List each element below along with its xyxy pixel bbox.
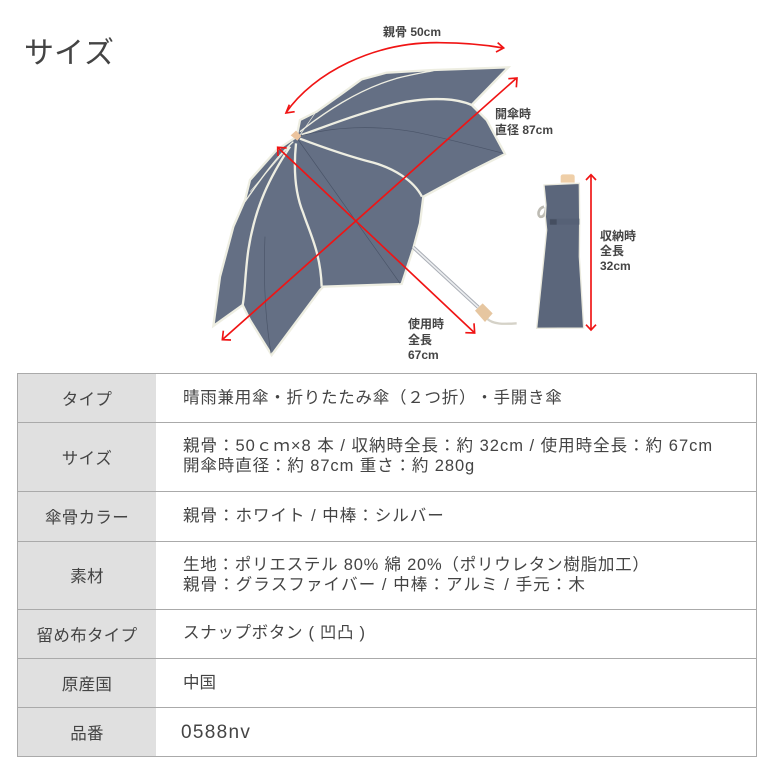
row: size: サイズ	[62, 450, 112, 468]
diameter label	[495, 106, 553, 137]
umbrella size diagram	[212, 24, 636, 362]
open length label: 67cm	[408, 348, 439, 362]
title: サイズ	[24, 37, 114, 70]
row: type: 晴雨兼用傘・折りたたみ傘（２つ折）・手開き傘	[183, 389, 562, 407]
red length arrow	[586, 175, 596, 330]
top ferrule	[291, 131, 301, 141]
row: size	[18, 423, 756, 492]
row: item number: 0588nv	[181, 722, 251, 743]
row: fastener	[18, 610, 756, 659]
diameter label: 直径 87cm	[495, 122, 553, 137]
rib label: 親骨 50cm	[383, 24, 441, 39]
folded length label: 全長	[600, 243, 624, 258]
row: material	[18, 542, 756, 610]
row: material: 素材	[70, 568, 104, 586]
canopy	[213, 67, 508, 355]
open length label: 全長	[408, 332, 432, 347]
folded canopy	[537, 183, 584, 328]
row: item number: 品番	[70, 724, 104, 742]
row: material: 親骨：グラスファイバー / 中棒：アルミ / 手元：木	[183, 576, 586, 594]
open length label	[408, 316, 444, 362]
folded handle	[561, 174, 575, 183]
open length label: 使用時	[408, 316, 444, 331]
row: frame colour: 親骨：ホワイト / 中棒：シルバー	[183, 506, 445, 524]
row: origin: 中国	[183, 674, 216, 692]
row: type	[18, 374, 756, 423]
row: type: タイプ	[62, 390, 112, 408]
row: fastener: 留め布タイプ	[37, 626, 137, 644]
row: material: 生地：ポリエステル 80% 綿 20%（ポリウレタン樹脂加工）	[183, 556, 650, 574]
folded length label: 収納時	[600, 228, 636, 243]
open umbrella	[213, 67, 517, 355]
folded umbrella	[537, 174, 596, 330]
folded strap	[548, 219, 579, 225]
row: item number	[18, 708, 251, 756]
folded length label	[600, 228, 636, 273]
row: frame colour: 傘骨カラー	[45, 509, 129, 527]
row: origin	[18, 659, 756, 708]
diameter label: 開傘時	[495, 106, 531, 121]
strap loop	[539, 207, 546, 217]
folded length label: 32cm	[600, 259, 631, 273]
row: size: 親骨：50ｃｍ×8 本 / 収納時全長：約 32cm / 使用時全長：約 67cm	[183, 437, 713, 455]
canopy ribs	[243, 99, 472, 305]
row: frame colour	[18, 492, 756, 542]
red measurement arrows	[222, 43, 517, 340]
shaft and handle	[413, 247, 478, 307]
row: origin: 原産国	[62, 676, 112, 694]
row: fastener: スナップボタン ( 凹凸 )	[183, 624, 366, 642]
spec table	[17, 373, 757, 757]
row: size: 開傘時直径：約 87cm 重さ：約 280g	[183, 457, 475, 475]
